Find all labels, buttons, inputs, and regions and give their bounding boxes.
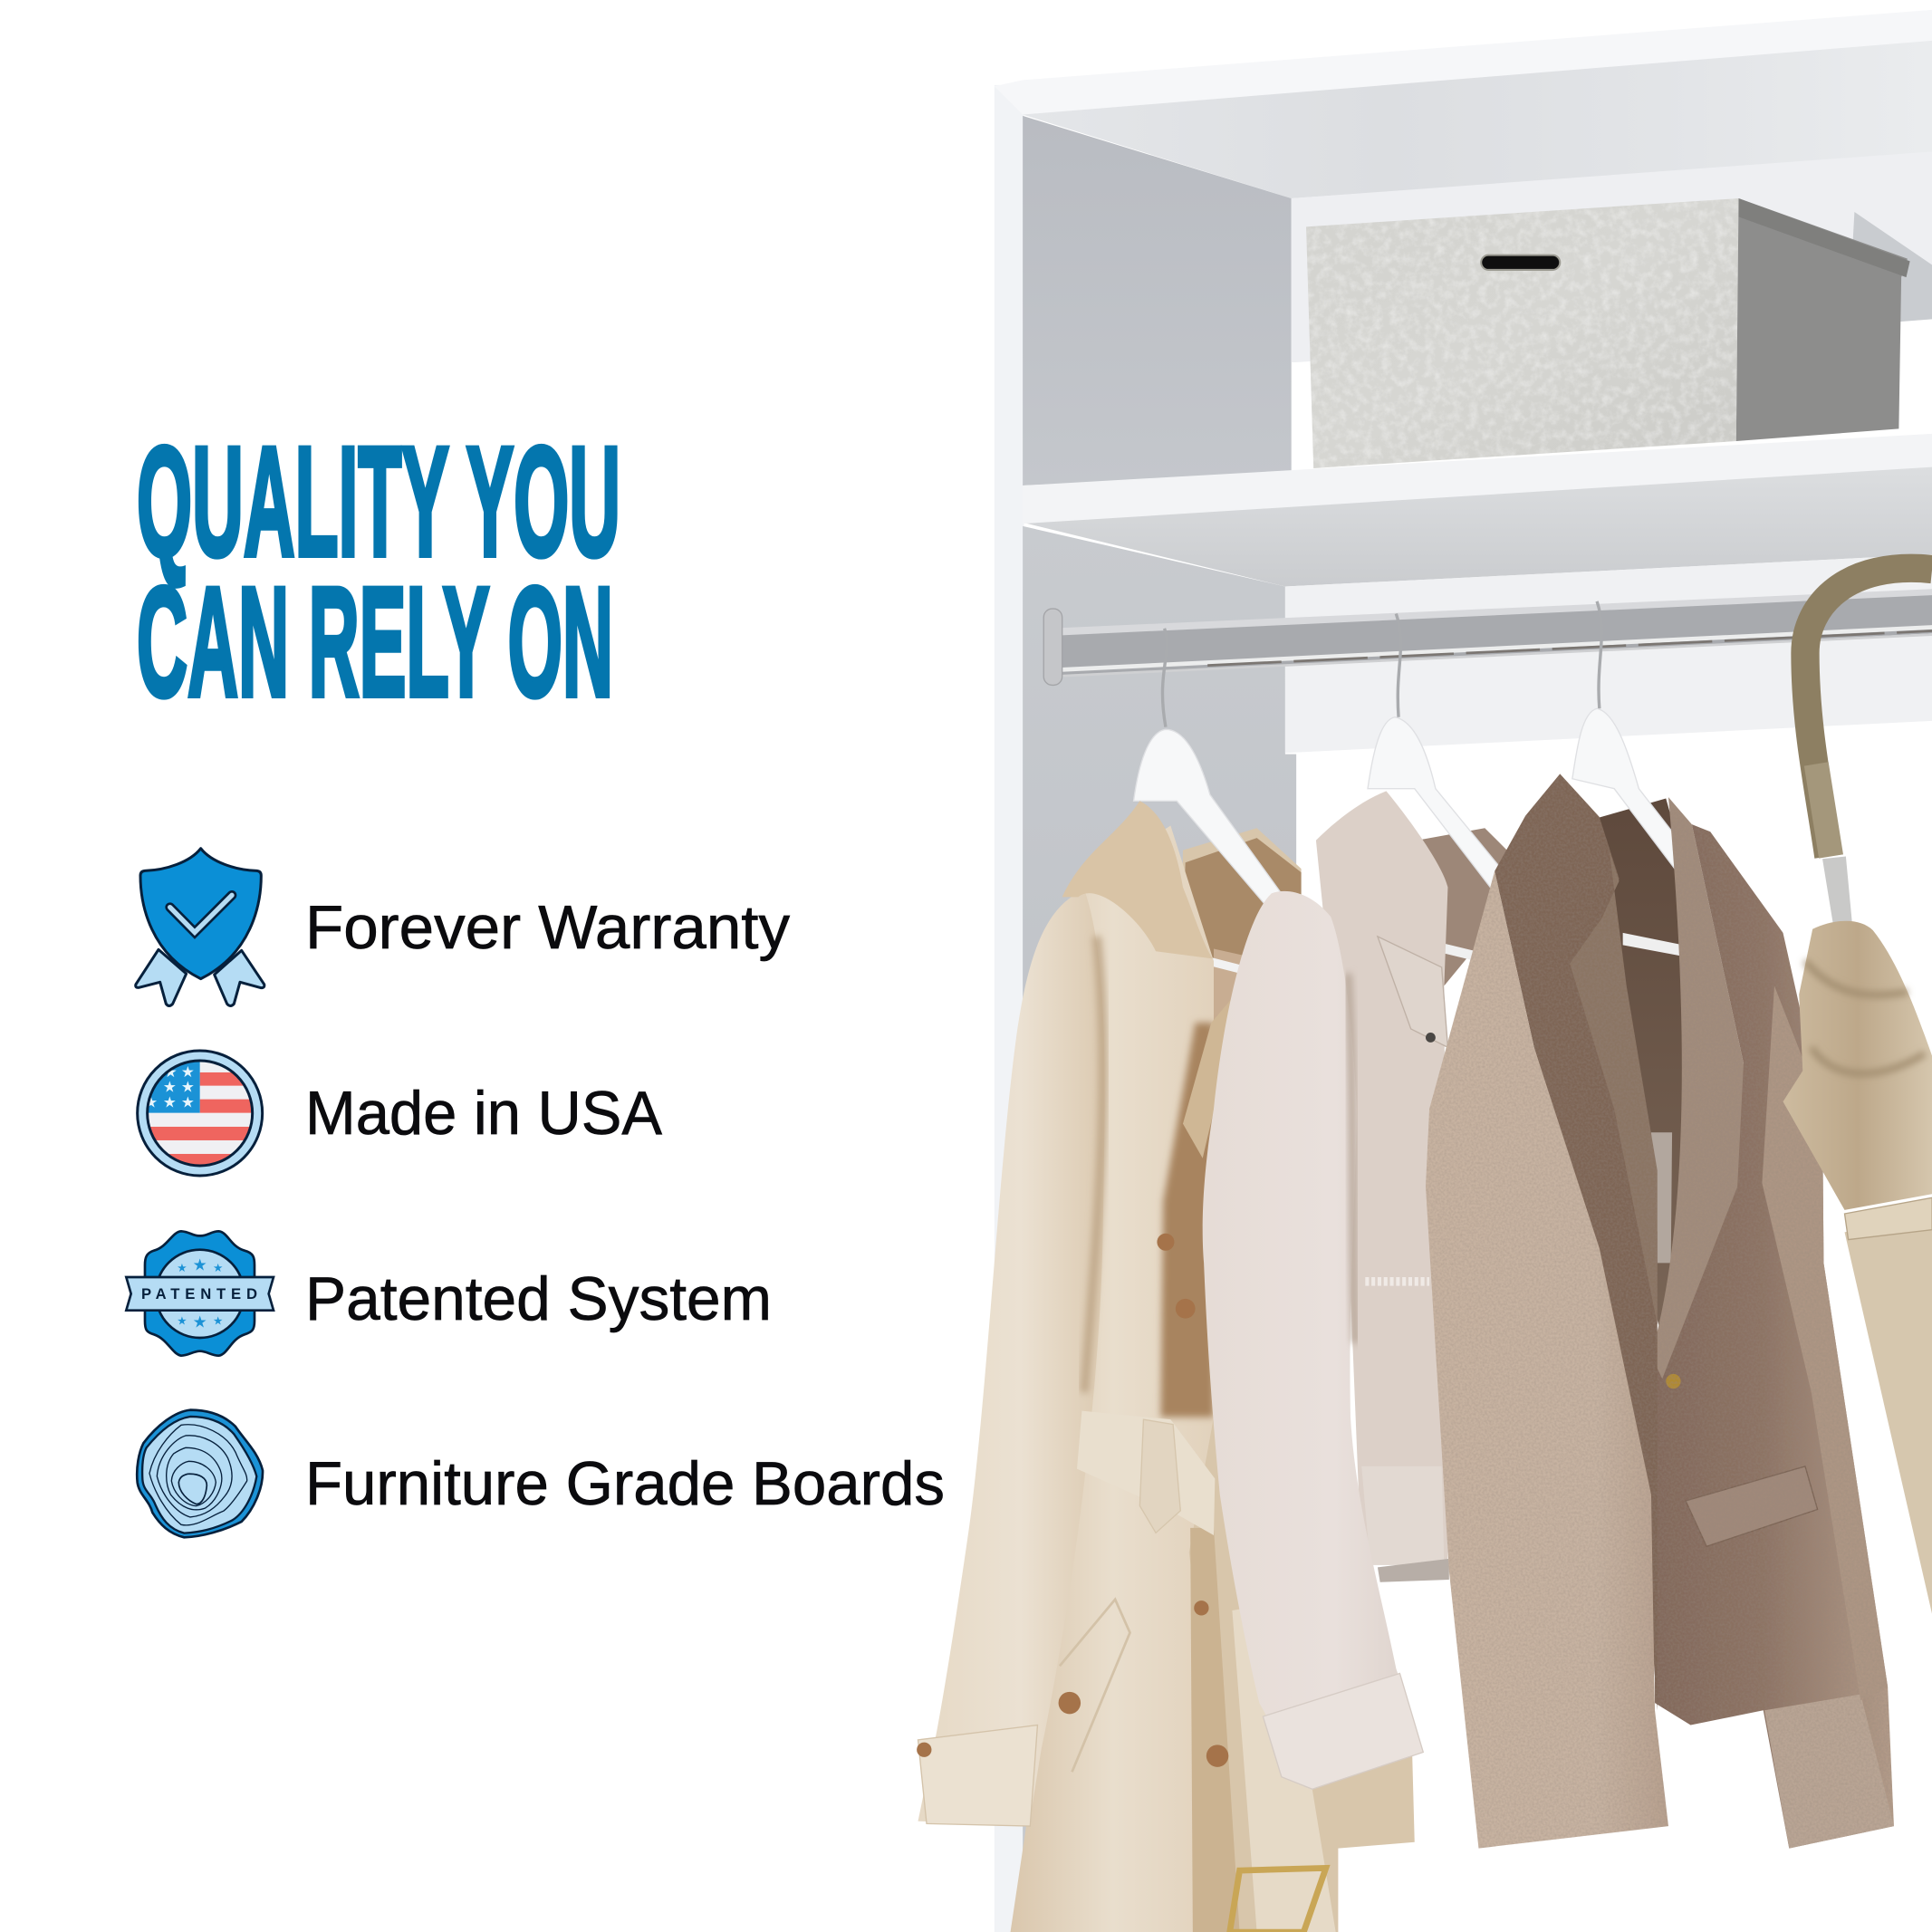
photo: wardrobe closet with hanging coats <box>917 10 1932 1932</box>
icon: USA flag: ★ <box>144 1093 158 1110</box>
icon: patented badge <box>126 1231 274 1356</box>
storage box <box>1306 198 1910 468</box>
blazer button <box>1666 1374 1681 1389</box>
label: warranty: Forever Warranty <box>305 893 790 962</box>
white jacket <box>1203 791 1449 1789</box>
coat buttons <box>917 1234 1228 1767</box>
coat pocket and cuff <box>1060 1600 1129 1772</box>
icon: USA flag: ★ <box>163 1093 177 1110</box>
umbrella <box>1783 568 1932 1614</box>
icon: patented badge: ★ <box>213 1261 223 1274</box>
icon: patented badge: ★ <box>193 1256 207 1275</box>
coat belt <box>1077 1411 1215 1535</box>
icon: USA flag: ★ <box>181 1063 195 1081</box>
icon: patented badge: ★ <box>177 1314 187 1328</box>
icon: patented badge: ★ <box>177 1261 187 1274</box>
icon: USA flag: ★ <box>181 1093 195 1110</box>
heading <box>137 415 620 729</box>
text: CAN RELY ON <box>137 555 613 729</box>
icon: USA flag: ★ <box>181 1079 195 1096</box>
blazer sleeve <box>1764 1695 1894 1849</box>
coat collar <box>1062 801 1213 958</box>
text: QUALITY YOU <box>137 415 620 589</box>
icon: patented badge: ★ <box>213 1314 223 1328</box>
blazer right lapel <box>1651 797 1744 1379</box>
icon: wood rings <box>137 1410 263 1537</box>
hanging rod <box>1043 589 1932 727</box>
icon: warranty shield <box>136 849 264 1005</box>
label: patented system: Patented System <box>305 1264 772 1333</box>
icon: USA flag <box>138 1051 263 1176</box>
blazer pocket flap <box>1686 1466 1818 1546</box>
trench coat <box>917 801 1336 1932</box>
blazer left lapel <box>1570 851 1658 1324</box>
brown blazer <box>1426 774 1894 1849</box>
closet shelving unit <box>995 10 1932 1932</box>
icon: patented badge: PATENTED <box>141 1285 257 1302</box>
blazer front panel <box>1426 871 1668 1849</box>
garment back linings <box>1170 799 1698 1932</box>
icon: patented badge: ★ <box>193 1312 207 1331</box>
label: furniture grade boards: Furniture Grade Boards <box>305 1449 945 1518</box>
label: made in USA: Made in USA <box>305 1079 663 1148</box>
belt strap and gold buckle <box>1232 1602 1336 1932</box>
icon: USA flag: ★ <box>163 1079 177 1096</box>
coat hangers <box>1134 708 1698 909</box>
icon: USA flag: ★ <box>164 1063 178 1081</box>
blazer dark band <box>1495 774 1658 1710</box>
